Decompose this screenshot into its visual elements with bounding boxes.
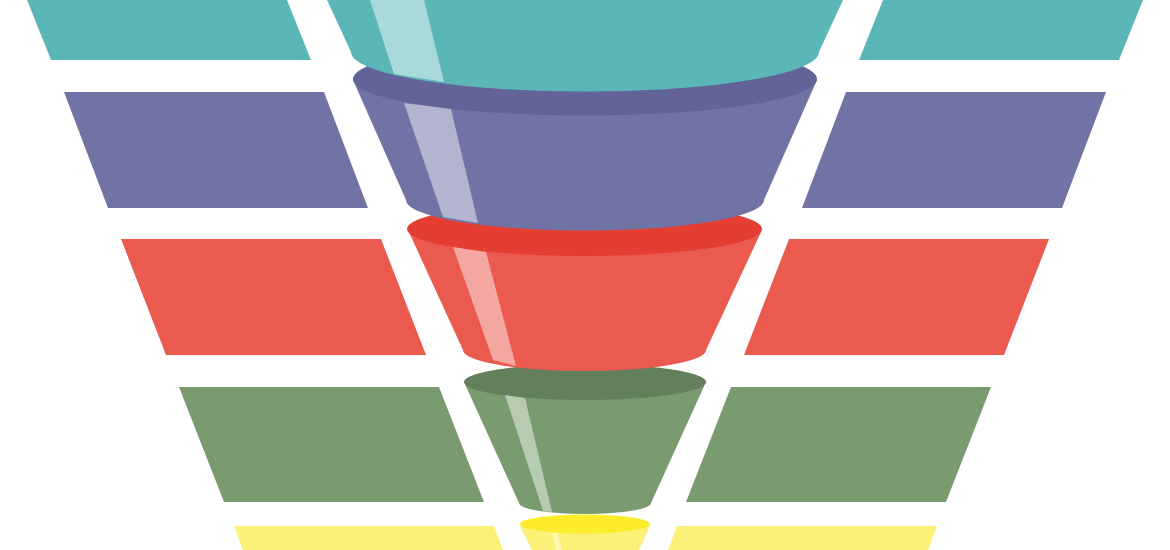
funnel tier: yellow [520, 514, 650, 550]
panel: yellow left band [234, 526, 503, 550]
funnel tier: purple [353, 42, 817, 230]
funnel tier: red [407, 202, 762, 371]
panel: purple right band [802, 92, 1106, 208]
funnel tier: green [464, 364, 706, 514]
panel: green right band [686, 387, 991, 502]
panel: teal left band [27, 0, 311, 60]
panel: green left band [179, 387, 484, 502]
panel: purple left band [64, 92, 368, 208]
panel: red right band [744, 239, 1049, 355]
panel: red left band [121, 239, 426, 355]
panel: yellow right band [668, 526, 937, 550]
panel: teal right band [859, 0, 1143, 60]
funnel tier: teal [327, 0, 843, 92]
